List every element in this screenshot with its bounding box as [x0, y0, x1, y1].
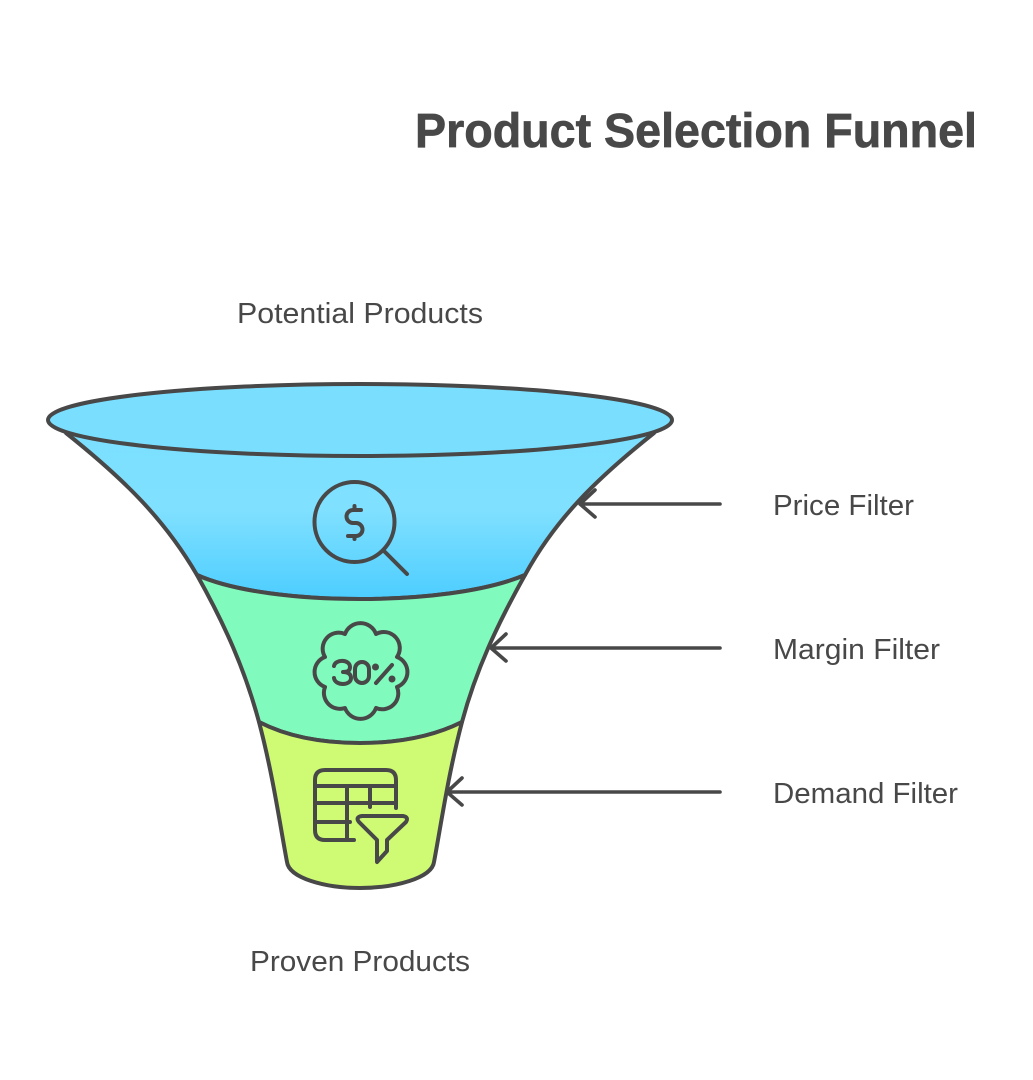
- funnel section: demand filter: [259, 722, 462, 888]
- label: potential products: Potential Products: [237, 298, 483, 330]
- label: margin filter: Margin Filter: [773, 634, 940, 666]
- icon: magnifying glass with dollar: [314, 482, 407, 574]
- label: price filter: Price Filter: [773, 490, 914, 522]
- title: Product Selection Funnel: [415, 105, 977, 158]
- icon: table with filter: [315, 770, 407, 862]
- arrow: margin filter: [491, 634, 720, 661]
- arrow: demand filter: [447, 778, 720, 805]
- funnel: [48, 384, 672, 888]
- arrow: price filter: [580, 490, 720, 517]
- funnel section: margin filter: [197, 575, 525, 743]
- label: proven products: Proven Products: [250, 946, 470, 978]
- icon: 30% badge: [315, 623, 407, 719]
- label: demand filter: Demand Filter: [773, 778, 958, 810]
- funnel section: price filter: [66, 433, 654, 599]
- funnel rim: [48, 384, 672, 456]
